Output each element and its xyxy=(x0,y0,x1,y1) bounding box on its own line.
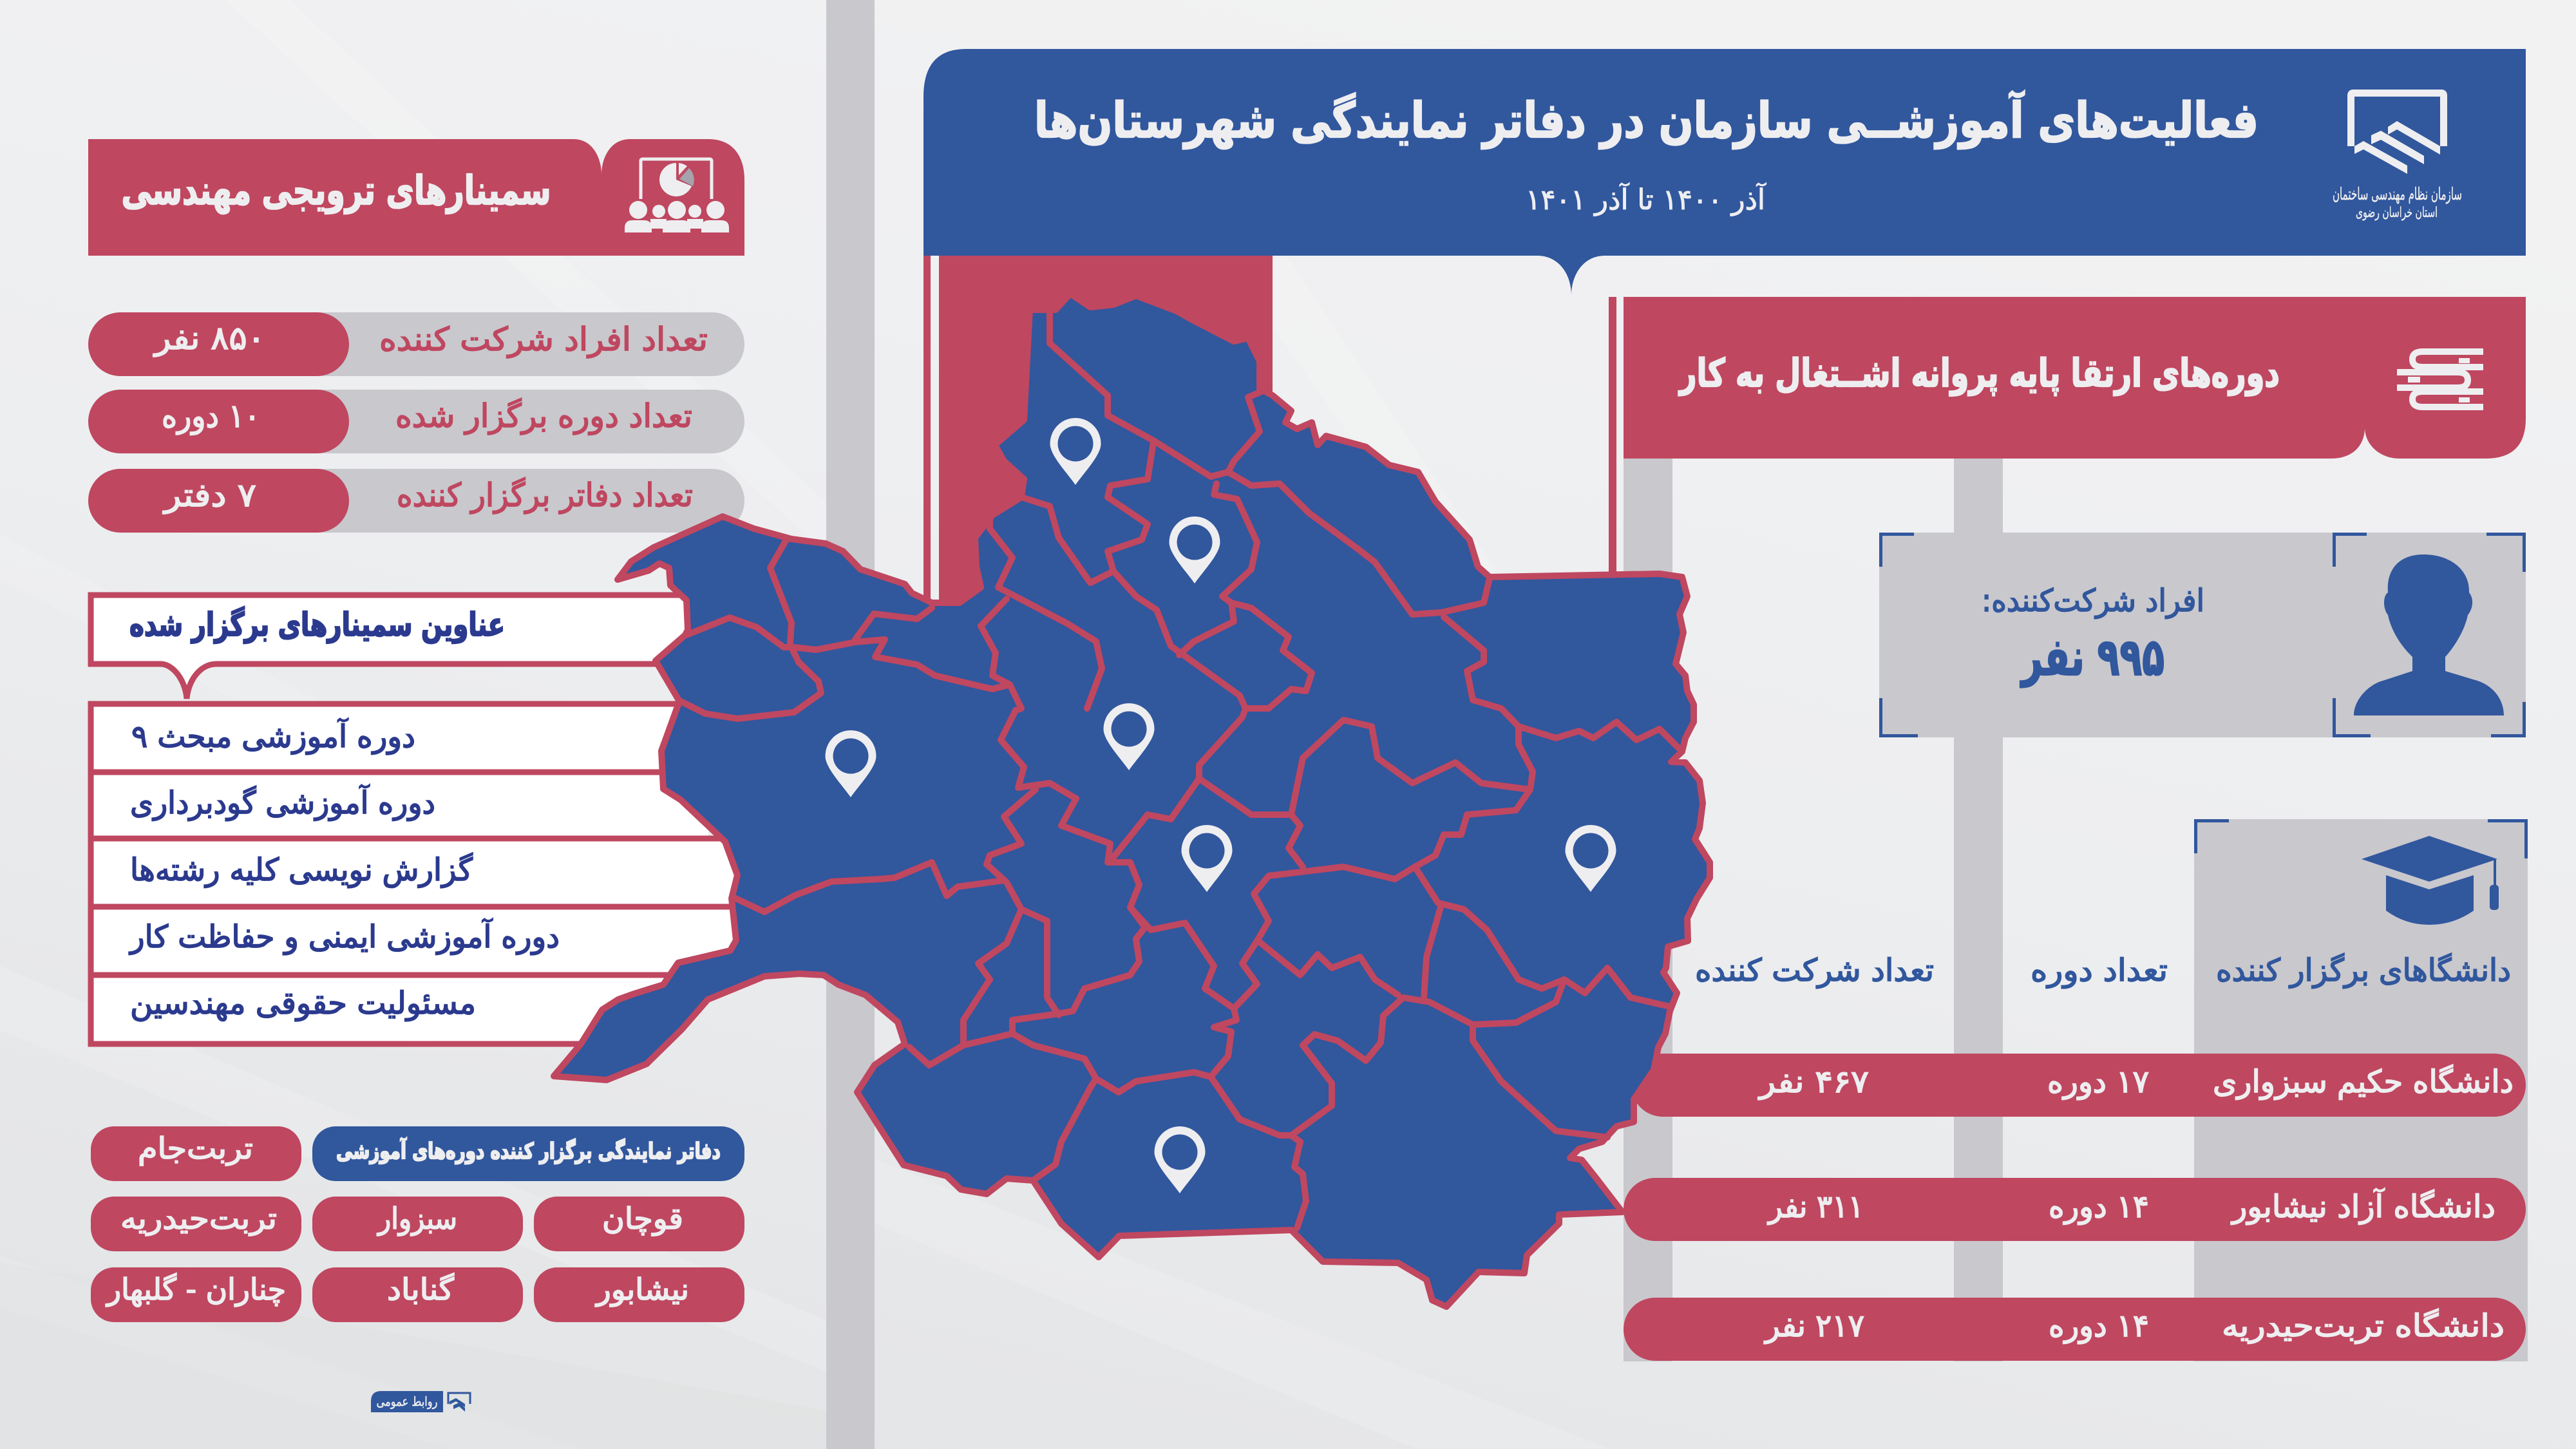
table column headers: دانشگاهای برگزار کننده xyxy=(2216,952,2511,989)
stat: offices: تعداد دفاتر برگزار کننده xyxy=(397,477,693,514)
seminars heading: سمینارهای ترویجی مهندسی xyxy=(121,167,551,214)
panel: seminar titles list: دوره آموزشی مبحث ۹ xyxy=(131,717,415,755)
table column headers xyxy=(1695,952,2511,989)
gray column strip two xyxy=(1954,459,2003,1361)
left gray vertical strip xyxy=(826,0,875,1449)
panel: seminar titles heading box xyxy=(91,595,692,700)
stat: courses held: ۱۰ دوره xyxy=(162,397,260,435)
public relations logo xyxy=(371,1391,470,1412)
panel: seminar titles list: مسئولیت حقوقی مهندسین xyxy=(130,985,476,1021)
table row: Azad Neyshabur: دانشگاه آزاد نیشابور xyxy=(2231,1188,2496,1225)
panel: representative offices pills: نیشابور xyxy=(595,1272,689,1307)
map district borders xyxy=(681,310,1682,1228)
icon: graduation cap xyxy=(2362,836,2499,925)
panel: engineering seminars xyxy=(88,139,744,256)
table row: Torbat Heydarieh: ۲۱۷ نفر xyxy=(1764,1308,1864,1344)
gray column strip one xyxy=(1624,459,1672,1361)
panel: participants card xyxy=(1879,533,2526,737)
panel: seminar titles list xyxy=(91,704,747,1044)
stat: participants xyxy=(88,312,744,376)
icon: map pin east xyxy=(1565,825,1616,892)
table row: Hakim Sabzevari: دانشگاه حکیم سبزواری xyxy=(2213,1064,2514,1100)
table row: Hakim Sabzevari xyxy=(1631,1054,2526,1117)
icon: map pin south xyxy=(1154,1126,1206,1193)
organization logo: استان خراسان رضوی xyxy=(2356,205,2438,221)
table row: Torbat Heydarieh: دانشگاه تربت‌حیدریه xyxy=(2222,1308,2505,1344)
map of Razavi Khorasan province xyxy=(554,294,1710,1307)
panel: seminar titles heading box: عناوین سمینارهای برگزار شده xyxy=(129,606,505,644)
table column headers: تعداد دوره xyxy=(2031,952,2168,989)
panel: representative offices pills: قوچان xyxy=(602,1201,683,1236)
panel: participants card: افراد شرکت‌کننده: xyxy=(1982,583,2204,619)
panel: license upgrade courses header: دوره‌های ارتقا پایه پروانه اشــتغال به کار xyxy=(1678,351,2280,396)
organization logo xyxy=(2333,93,2462,221)
main header banner xyxy=(923,49,2526,296)
panel: seminar titles list: دوره آموزشی گودبرداری xyxy=(130,784,435,821)
table row: Azad Neyshabur: ۱۴ دوره xyxy=(2049,1189,2149,1225)
stat: participants: ۸۵۰ نفر xyxy=(153,319,265,357)
icon: audience watching presentation xyxy=(625,159,729,232)
thin red strip right panel xyxy=(1609,297,1616,578)
table row: Azad Neyshabur: ۳۱۱ نفر xyxy=(1767,1189,1864,1225)
icon: stack of books xyxy=(2397,352,2483,407)
table column headers: تعداد شرکت کننده xyxy=(1695,952,1934,989)
panel: license upgrade courses header xyxy=(1624,297,2526,459)
table row: Torbat Heydarieh: ۱۴ دوره xyxy=(2049,1308,2149,1344)
table row: Azad Neyshabur xyxy=(1624,1178,2526,1241)
stat: offices xyxy=(88,469,744,533)
stat: offices: ۷ دفتر xyxy=(162,477,256,514)
main title: فعالیت‌های آموزشــی سازمان در دفاتر نمایندگی شهرستان‌ها xyxy=(1034,90,2259,149)
stat: participants: تعداد افراد شرکت کننده xyxy=(379,321,708,358)
panel: participants card: ۹۹۵ نفر xyxy=(2020,627,2164,688)
panel: seminar titles list: دوره آموزشی ایمنی و حفاظت کار xyxy=(129,918,560,955)
stat: courses held xyxy=(88,390,744,453)
icon: map pin south centre xyxy=(1181,825,1233,892)
panel: representative offices pills: چناران - گلبهار xyxy=(106,1272,286,1307)
table row: Hakim Sabzevari: ۴۶۷ نفر xyxy=(1758,1064,1869,1100)
panel: representative offices pills: سبزوار xyxy=(377,1201,457,1236)
icon: map pin Quchan area xyxy=(1050,418,1101,485)
seminars header banner xyxy=(88,139,744,256)
public relations logo: روابط عمومی xyxy=(376,1394,438,1409)
icon: map pin centre xyxy=(1104,703,1154,770)
panel: representative offices pills: دفاتر نمایندگی برگزار کننده دوره‌های آموزشی xyxy=(336,1137,721,1164)
map outline xyxy=(554,294,1710,1307)
panel: seminar titles list: گزارش نویسی کلیه رشته‌ها xyxy=(130,852,473,888)
date subtitle: آذر ۱۴۰۰ تا آذر ۱۴۰۱ xyxy=(1526,182,1766,216)
panel: representative offices pills: تربت‌حیدریه xyxy=(120,1201,277,1236)
table row: Torbat Heydarieh xyxy=(1624,1298,2526,1361)
organization logo: سازمان نظام مهندسی ساختمان xyxy=(2333,185,2462,204)
panel: representative offices pills xyxy=(91,1126,744,1322)
panel: universities column xyxy=(2194,819,2528,1361)
panel: representative offices pills: گناباد xyxy=(387,1272,454,1307)
red block behind the map xyxy=(923,256,1273,600)
panel: representative offices pills: تربت‌جام xyxy=(138,1131,253,1166)
icon: map pin north centre xyxy=(1170,516,1220,583)
stat: courses held: تعداد دوره برگزار شده xyxy=(395,397,692,435)
table row: Hakim Sabzevari: ۱۷ دوره xyxy=(2047,1064,2149,1100)
icon: map pin west xyxy=(826,730,876,797)
icon: person silhouette xyxy=(2354,554,2504,715)
